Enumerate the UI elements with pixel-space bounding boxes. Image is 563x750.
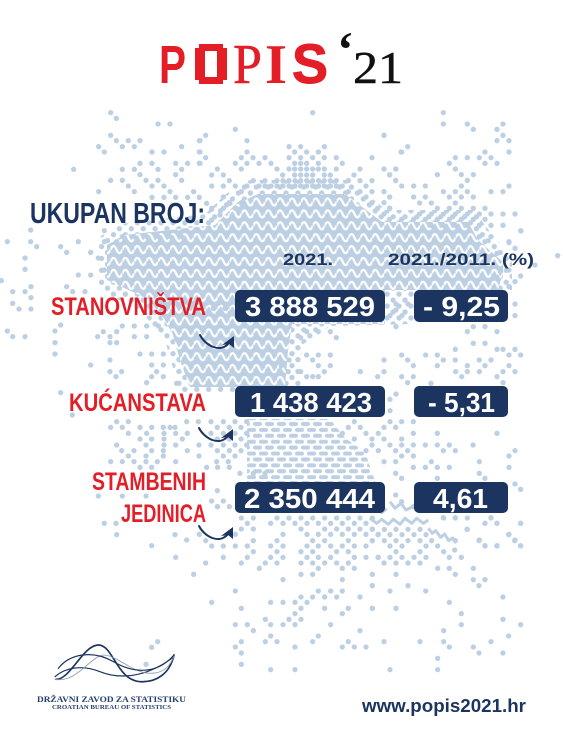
logo waves [55,645,174,682]
map: scattered dots around second row right [288,372,521,546]
row: dwellings [92,468,508,539]
logo name: DRŽAVNI ZAVOD ZA STATISTIKU [37,694,186,704]
map: dots near logo [146,642,158,664]
row: households [69,386,508,441]
title letter P serif: P [233,34,262,96]
map: dotted rows south [247,419,376,484]
map: scattered dots top left [74,113,199,197]
background: dotted map of Croatia [1,113,558,670]
change box: 4,61 [433,483,488,514]
title year: 21 [353,42,403,93]
title: POPIS '21 [159,21,403,96]
change box: - 5,31 [428,387,495,418]
logo english name: CROATIAN BUREAU OF STATISTICS [52,704,172,711]
map: scattered dots bottom right [372,518,521,670]
label line 1: STAMBENIH [92,468,206,496]
heading: total count: UKUPAN BROJ: [30,198,205,230]
arrow [199,526,233,539]
logo: Croatian Bureau of Statistics [37,645,186,711]
title letter S: S [292,32,328,95]
label: KUĆANSTAVA [69,387,206,417]
map: scattered dots left [1,203,242,365]
title letter P: P [159,35,186,95]
map: scattered dots around second row left [61,372,265,557]
arrow [199,428,233,441]
label line 2: JEDINICA [121,500,206,528]
value box: 2 350 444 [244,483,375,514]
column header change: 2021./2011. (%) [388,250,534,269]
column header 2021: 2021. [283,250,333,269]
title letter I: I [265,34,287,96]
map: dense woven area [107,194,503,387]
arrow [200,335,234,348]
change box: - 9,25 [423,291,500,322]
map: dalmatian coast waves [367,502,456,543]
map: scattered dots right of first row [281,231,535,366]
title letter O with block frame: O [196,35,226,95]
change box [414,482,508,514]
row: population [51,290,508,348]
map: scattered dots top right [384,113,558,256]
value box: 1 438 423 [250,387,372,418]
title apostrophe: ‘ [337,21,354,77]
label: STANOVNIŠTVA [51,291,206,321]
map: dot fringe around the woven area [98,180,512,392]
value box: 3 888 529 [245,291,375,322]
map: scattered dots bottom centre [194,501,378,670]
website: www.popis2021.hr [361,696,526,716]
map: scattered dots top centre [200,113,401,208]
